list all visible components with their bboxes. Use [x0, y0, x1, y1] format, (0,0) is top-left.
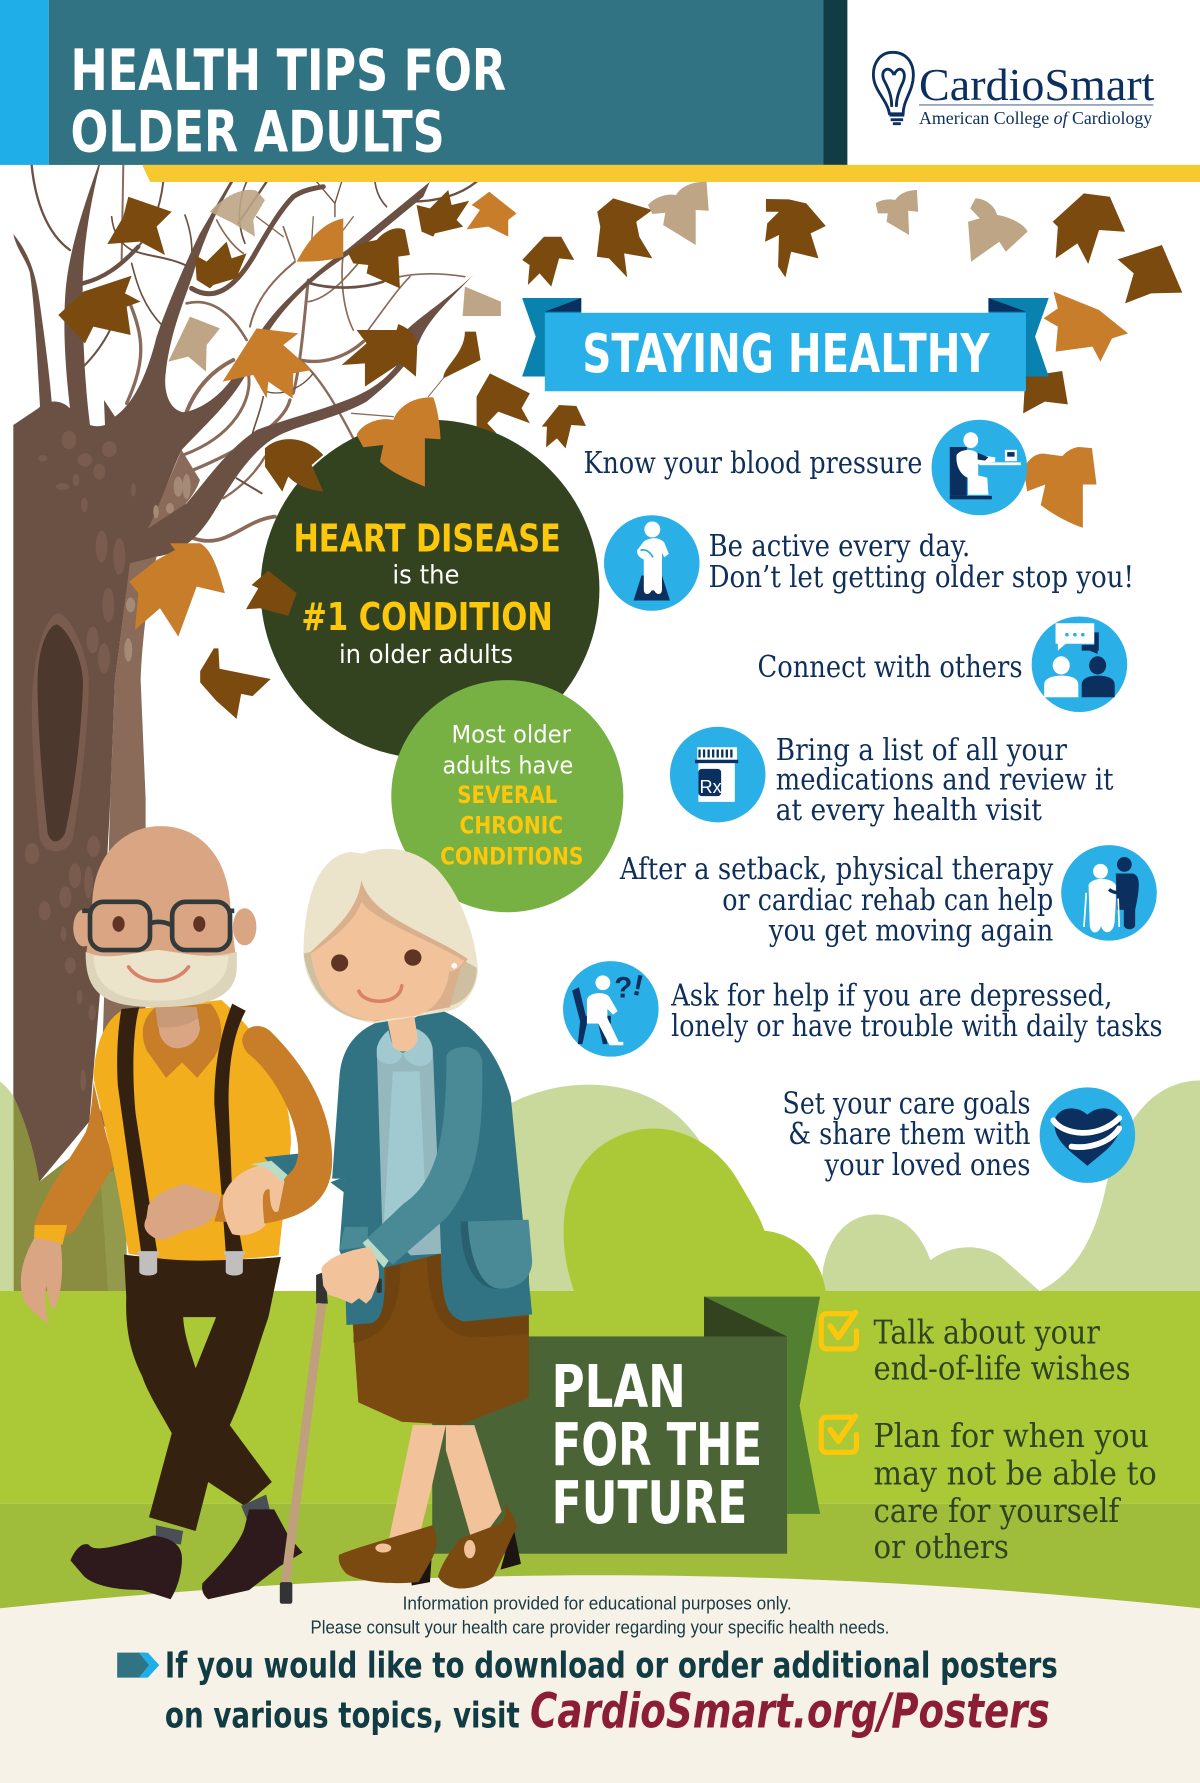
checklist: may not be able to	[874, 1453, 1157, 1492]
tip: physical therapy: or cardiac rehab can help	[722, 883, 1053, 917]
tip: be active: Don’t let getting older stop you!	[709, 560, 1134, 594]
banner: staying healthy: STAYING HEALTHY	[582, 322, 991, 385]
tip: ask for help: !	[630, 969, 646, 1003]
logo: CardioSmart: American College of Cardiology	[919, 108, 1152, 128]
tip: be active: Be active every day.	[709, 529, 970, 563]
tip: connect with others: Connect with others	[758, 650, 1023, 684]
green circle: chronic conditions: adults have	[442, 751, 573, 779]
tip: care goals: & share them with	[788, 1117, 1031, 1151]
tip: physical therapy: you get moving again	[768, 914, 1053, 948]
checklist: Talk about your	[874, 1312, 1100, 1351]
tip: ask for help	[563, 961, 1162, 1057]
tip: connect with others	[758, 616, 1127, 712]
banner: plan for the future: FOR THE	[552, 1410, 762, 1479]
tip: ask for help: Ask for help if you are depressed,	[670, 978, 1112, 1012]
footer panel	[0, 1575, 1200, 1783]
banner: plan for the future	[432, 1297, 820, 1554]
dark circle: heart disease: in older adults	[339, 640, 513, 670]
tip: care goals	[783, 1087, 1135, 1183]
checklist	[821, 1312, 1157, 1566]
tip: physical therapy	[619, 845, 1157, 948]
footer disclaimer	[311, 1593, 889, 1637]
footer call to action	[165, 1646, 1058, 1740]
tip: medications: at every health visit	[776, 793, 1042, 827]
illustration: older woman	[223, 849, 532, 1604]
tip: be active	[604, 515, 1134, 611]
dark circle: heart disease: is the	[392, 560, 460, 590]
banner: staying healthy	[522, 298, 1049, 391]
leaves on the tree	[58, 190, 530, 637]
tip: care goals: Set your care goals	[783, 1087, 1031, 1121]
ground	[0, 1291, 1200, 1629]
tip: physical therapy: After a setback, physical therapy	[619, 852, 1054, 886]
green circle: chronic conditions: CONDITIONS	[440, 842, 584, 870]
logo: CardioSmart: CardioSmart	[919, 59, 1155, 110]
logo: CardioSmart	[873, 52, 1155, 128]
tree	[13, 165, 477, 1182]
dark circle: heart disease	[260, 420, 599, 759]
banner: plan for the future: PLAN	[552, 1352, 686, 1421]
yellow header stripe	[142, 165, 1200, 182]
tip: medications: Rx	[700, 777, 722, 797]
tip: medications: medications and review it	[776, 762, 1114, 796]
checklist: Plan for when you	[874, 1416, 1149, 1455]
background bushes	[500, 1081, 1200, 1292]
falling leaf near trunk	[200, 648, 271, 719]
footer call to action: on various topics, visit	[165, 1696, 520, 1737]
tip: blood pressure: Know your blood pressure	[584, 446, 922, 480]
tip: ask for help: ?	[614, 972, 632, 1005]
foreground bush overlapping tree	[0, 1082, 127, 1291]
green circle: chronic conditions: Most older	[452, 721, 571, 749]
header: title panel: HEALTH TIPS FOR	[71, 38, 506, 104]
checklist: or others	[874, 1527, 1009, 1566]
green circle: chronic conditions	[391, 680, 623, 912]
green circle: chronic conditions: CHRONIC	[460, 812, 563, 840]
checklist: end-of-life wishes	[874, 1349, 1131, 1388]
orange leaf beside blood pressure icon	[1024, 447, 1096, 528]
checklist: care for yourself	[874, 1491, 1122, 1530]
tip: medications: Bring a list of all your	[776, 733, 1068, 767]
header: title panel: OLDER ADULTS	[71, 99, 445, 165]
dark circle: heart disease: HEART DISEASE	[293, 517, 561, 562]
tip: care goals: your loved ones	[824, 1148, 1031, 1182]
icon: footer arrow	[117, 1653, 159, 1678]
green circle: chronic conditions: SEVERAL	[457, 781, 557, 809]
illustration: older man	[21, 826, 332, 1599]
header: blue tab	[0, 0, 49, 165]
banner: plan for the future: FUTURE	[552, 1468, 747, 1537]
header: title panel	[49, 0, 847, 165]
dark circle: heart disease: #1 CONDITION	[301, 595, 553, 640]
footer call to action: CardioSmart.org/Posters	[530, 1685, 1050, 1740]
footer disclaimer: Information provided for educational purposes only.	[403, 1593, 792, 1613]
footer disclaimer: Please consult your health care provider regarding your specific health needs.	[311, 1617, 889, 1637]
tip: medications	[670, 727, 1114, 827]
tip: blood pressure	[584, 420, 1027, 515]
leaves drifting right	[522, 182, 1182, 448]
